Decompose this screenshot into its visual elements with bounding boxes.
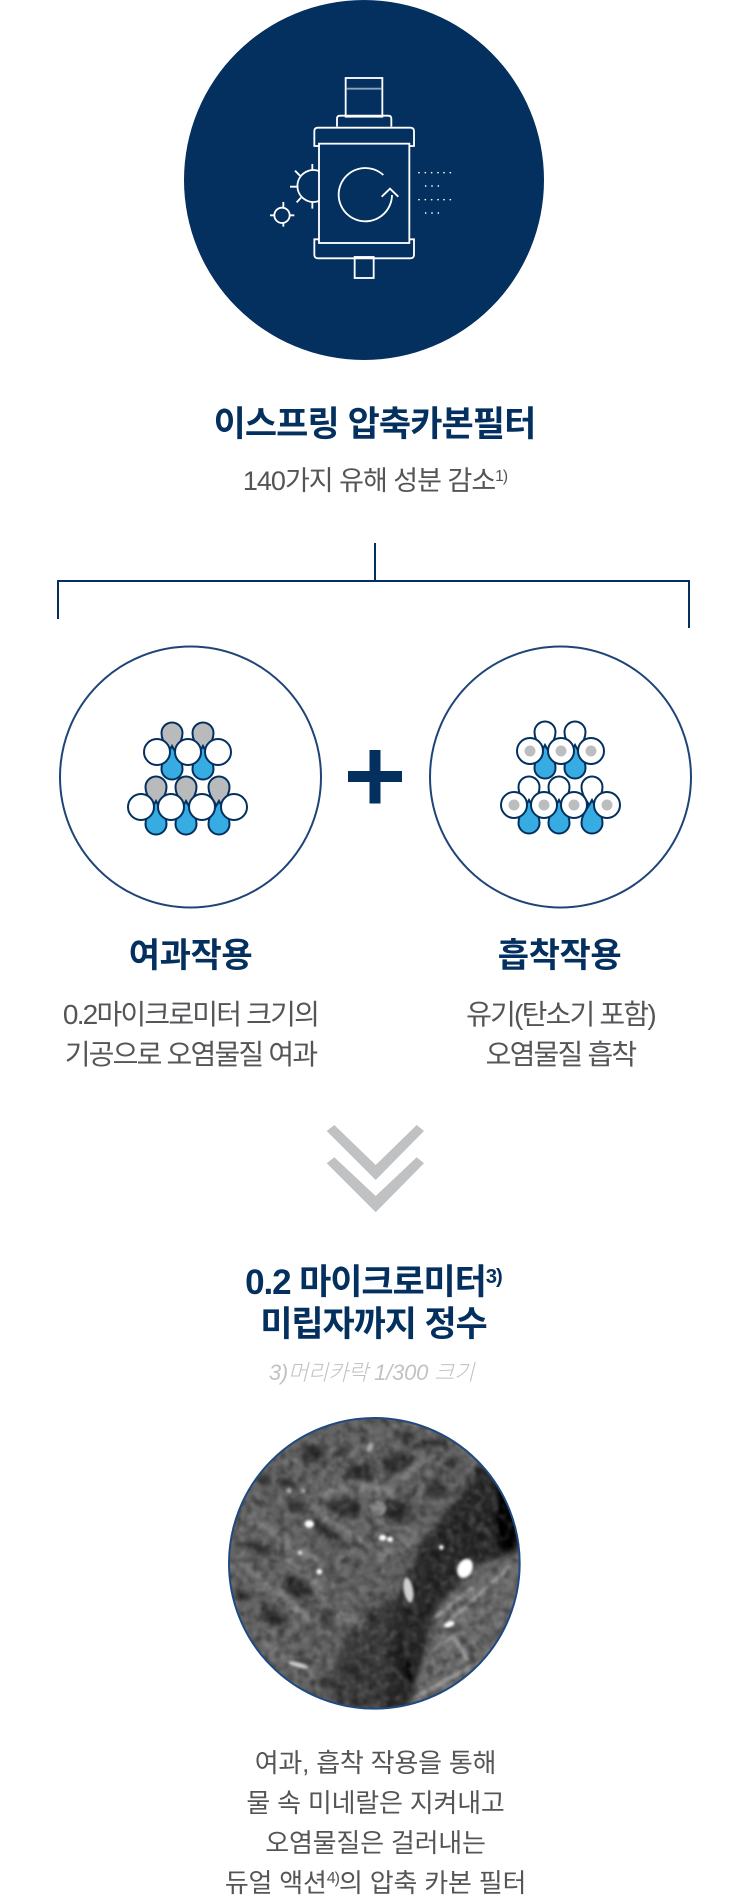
text: filtration description: 기공으로 오염물질 여과 <box>65 1039 316 1070</box>
text: adsorption description <box>466 999 655 1070</box>
text: adsorption description: 오염물질 흡착 <box>486 1039 635 1070</box>
text: closing description: 오염물질은 걸러내는 <box>265 1828 486 1858</box>
heading: adsorption: 흡착작용 <box>498 937 621 975</box>
heading: 0.2 micrometer: 0.2 마이크로미터3) <box>245 1263 502 1302</box>
bracket connector <box>58 543 689 628</box>
heading: filtration: 여과작용 <box>129 937 252 975</box>
title: 이스프링 압축카본필터 <box>214 405 535 444</box>
text: filtration description <box>63 999 318 1070</box>
heading: 0.2 micrometer: 미립자까지 정수 <box>260 1305 487 1344</box>
arrow: double chevron down <box>327 1125 424 1212</box>
icon: filter in navy circle <box>184 0 544 360</box>
text: closing description: 물 속 미네랄은 지켜내고 <box>246 1788 505 1818</box>
text: adsorption description: 유기(탄소기 포함) <box>466 999 655 1030</box>
text: closing description: 여과, 흡착 작용을 통해 <box>255 1748 496 1778</box>
panel: adsorption circle icon <box>430 646 691 908</box>
text: closing description: 듀얼 액션4)의 압축 카본 필터 <box>225 1868 526 1898</box>
subtitle: 140가지 유해 성분 감소1) <box>243 466 507 496</box>
icon: plus sign <box>348 750 402 804</box>
photo: carbon micrograph <box>223 1413 527 1713</box>
panel: filtration circle icon <box>60 646 321 908</box>
footnote: 3)머리카락 1/300 크기 <box>269 1360 474 1385</box>
heading: 0.2 micrometer <box>245 1263 502 1344</box>
text: closing description <box>225 1748 526 1898</box>
text: filtration description: 0.2마이크로미터 크기의 <box>63 999 318 1030</box>
